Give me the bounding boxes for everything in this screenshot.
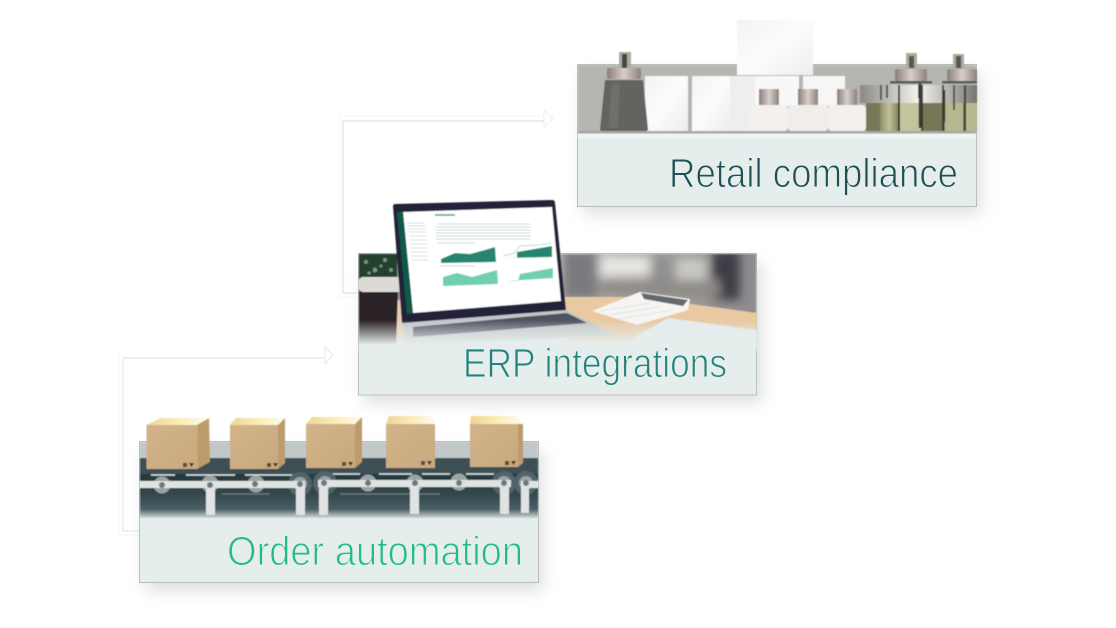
dark bottle xyxy=(600,52,648,131)
heading: retail compliance: Retail compliance xyxy=(669,150,958,196)
rails and legs xyxy=(140,480,538,515)
laptop xyxy=(393,200,618,345)
connector arrow: order automation to ERP integrations xyxy=(119,347,333,535)
box 2 xyxy=(230,418,285,469)
small white jars xyxy=(750,89,866,131)
calculator xyxy=(592,292,690,325)
office desk photo xyxy=(359,200,757,351)
gold bottles xyxy=(860,53,977,131)
box 5 xyxy=(470,416,523,467)
heading: ERP integrations: ERP integrations xyxy=(463,340,727,386)
product shelf photo xyxy=(578,20,977,138)
panel: order automation xyxy=(140,416,543,591)
connector arrow: ERP integrations to retail compliance xyxy=(340,110,553,297)
box 3 xyxy=(306,417,362,468)
heading: order automation: Order automation xyxy=(227,528,523,574)
dashboard charts xyxy=(407,215,553,286)
panel: ERP integrations xyxy=(358,200,762,403)
panel: retail compliance xyxy=(578,20,981,214)
white cubes xyxy=(645,20,845,131)
conveyor photo xyxy=(140,416,538,518)
cardboard boxes xyxy=(146,416,523,469)
box 4 xyxy=(386,416,435,468)
box 1 xyxy=(146,418,210,469)
end rollers xyxy=(288,471,538,496)
plant xyxy=(359,254,397,280)
coffee cup xyxy=(359,277,402,345)
